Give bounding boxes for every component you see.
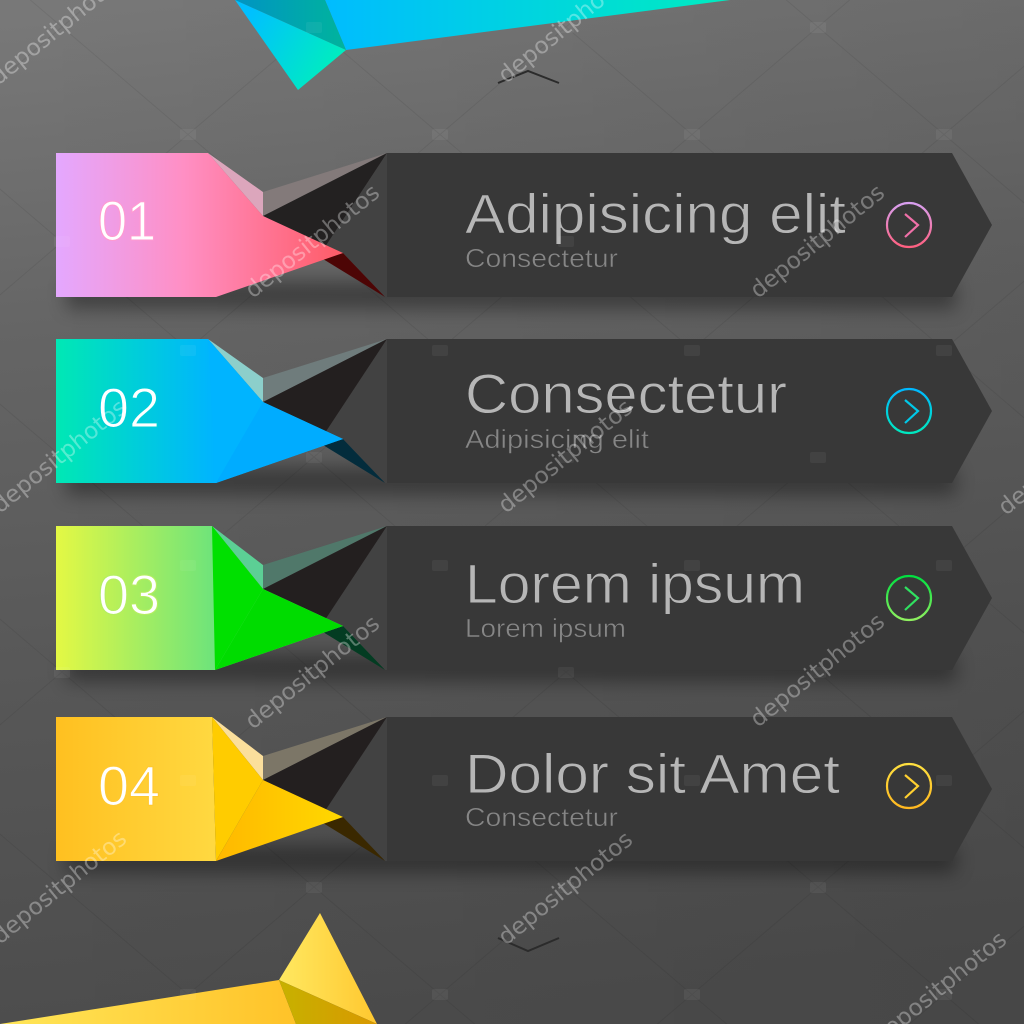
dark arrow panel bbox=[387, 717, 992, 861]
ribbon bbox=[56, 526, 343, 670]
icon: arrow circle bbox=[887, 203, 931, 247]
watermarks: depositphotos bbox=[240, 611, 385, 735]
number: 01 bbox=[98, 189, 156, 252]
watermarks: depositphotos bbox=[240, 180, 385, 304]
icon: arrow circle bbox=[887, 764, 931, 808]
top ribbon fragment bbox=[235, 0, 730, 90]
watermarks: depositphotos bbox=[745, 180, 890, 304]
dark arrow panel bbox=[387, 153, 992, 297]
dark arrow panel bbox=[387, 526, 992, 670]
watermarks: depositphotos bbox=[493, 395, 638, 519]
subheading: Consectetur bbox=[465, 243, 618, 273]
dark arrow panel bbox=[387, 339, 992, 483]
option row 04 bbox=[56, 717, 992, 873]
icon: arrow circle bbox=[887, 389, 931, 433]
option row 01 bbox=[56, 153, 992, 309]
number: 02 bbox=[98, 376, 160, 439]
heading: Dolor sit Amet bbox=[465, 742, 840, 805]
watermarks: depositphotos bbox=[493, 827, 638, 951]
ribbon bbox=[56, 339, 343, 483]
subheading: Adipisicing elit bbox=[465, 424, 650, 454]
heading: Consectetur bbox=[465, 362, 787, 425]
watermarks: depositphotos bbox=[745, 609, 890, 733]
heading: Adipisicing elit bbox=[465, 182, 846, 245]
icon: down chevron bbox=[498, 938, 559, 951]
option row 02 bbox=[56, 339, 992, 495]
icon: up chevron bbox=[498, 71, 559, 83]
number: 03 bbox=[98, 563, 160, 626]
ribbon bbox=[56, 717, 216, 861]
subheading: Lorem ipsum bbox=[465, 613, 626, 643]
number: 04 bbox=[98, 754, 160, 817]
option row 03 bbox=[56, 526, 992, 682]
subheading: Consectetur bbox=[465, 802, 618, 832]
icon: arrow circle bbox=[887, 576, 931, 620]
bottom ribbon fragment bbox=[0, 913, 377, 1024]
heading: Lorem ipsum bbox=[465, 552, 805, 615]
ribbon bbox=[56, 153, 343, 297]
